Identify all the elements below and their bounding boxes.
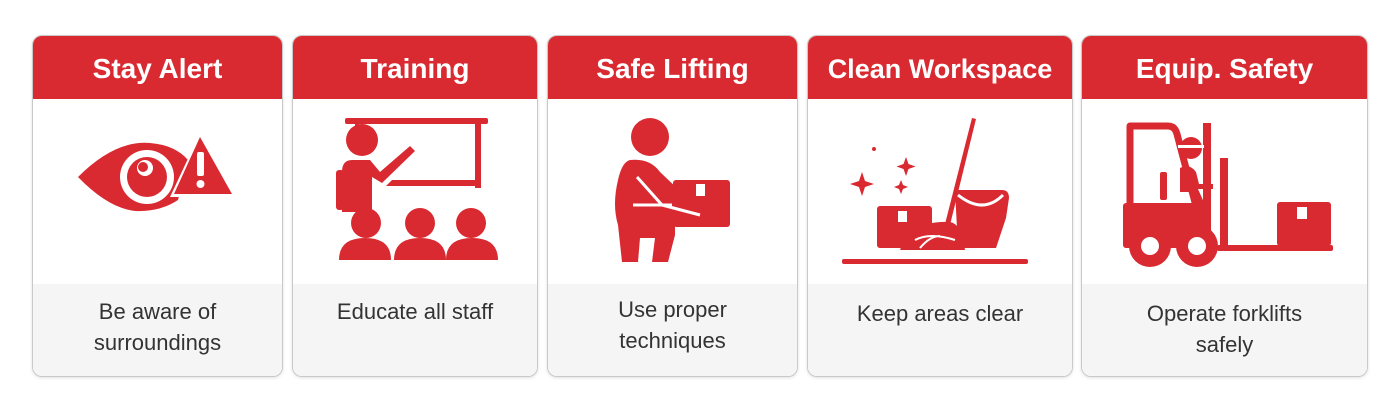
text: training <box>293 284 537 376</box>
text: clean workspace <box>808 284 1072 376</box>
heading: stay alert: Stay Alert <box>93 53 222 84</box>
text: safe lifting: techniques <box>619 328 726 353</box>
text: stay alert: Be aware of <box>99 299 216 324</box>
heading: training <box>293 36 537 99</box>
text: equipment safety <box>1082 284 1367 376</box>
panel: training <box>292 35 538 377</box>
icon: safe lifting <box>615 118 730 262</box>
panel: stay alert <box>32 35 283 377</box>
heading: clean workspace: Clean Workspace <box>828 54 1052 84</box>
panel: safe lifting <box>547 35 798 377</box>
icon: eye with warning <box>78 133 236 211</box>
text: clean workspace: Keep areas clear <box>857 301 1023 326</box>
heading: equipment safety: Equip. Safety <box>1136 53 1313 84</box>
heading: safe lifting <box>548 36 797 99</box>
text: safe lifting: Use proper <box>618 297 727 322</box>
text: safe lifting <box>548 284 797 376</box>
heading: safe lifting: Safe Lifting <box>596 53 749 84</box>
heading: training: Training <box>361 53 469 84</box>
text: equipment safety: safely <box>1196 332 1253 357</box>
panel: clean workspace <box>807 35 1073 377</box>
text: stay alert <box>33 284 282 376</box>
heading: stay alert <box>33 36 282 99</box>
text: equipment safety: Operate forklifts <box>1147 301 1302 326</box>
icon: mop bucket <box>842 118 1028 264</box>
heading: equipment safety <box>1082 36 1367 99</box>
text: stay alert: surroundings <box>94 330 221 355</box>
text: training: Educate all staff <box>337 299 493 324</box>
icon: trainer with audience <box>336 118 498 260</box>
heading: clean workspace <box>808 36 1072 99</box>
icon: forklift <box>1123 123 1333 267</box>
panel: equipment safety <box>1081 35 1368 377</box>
